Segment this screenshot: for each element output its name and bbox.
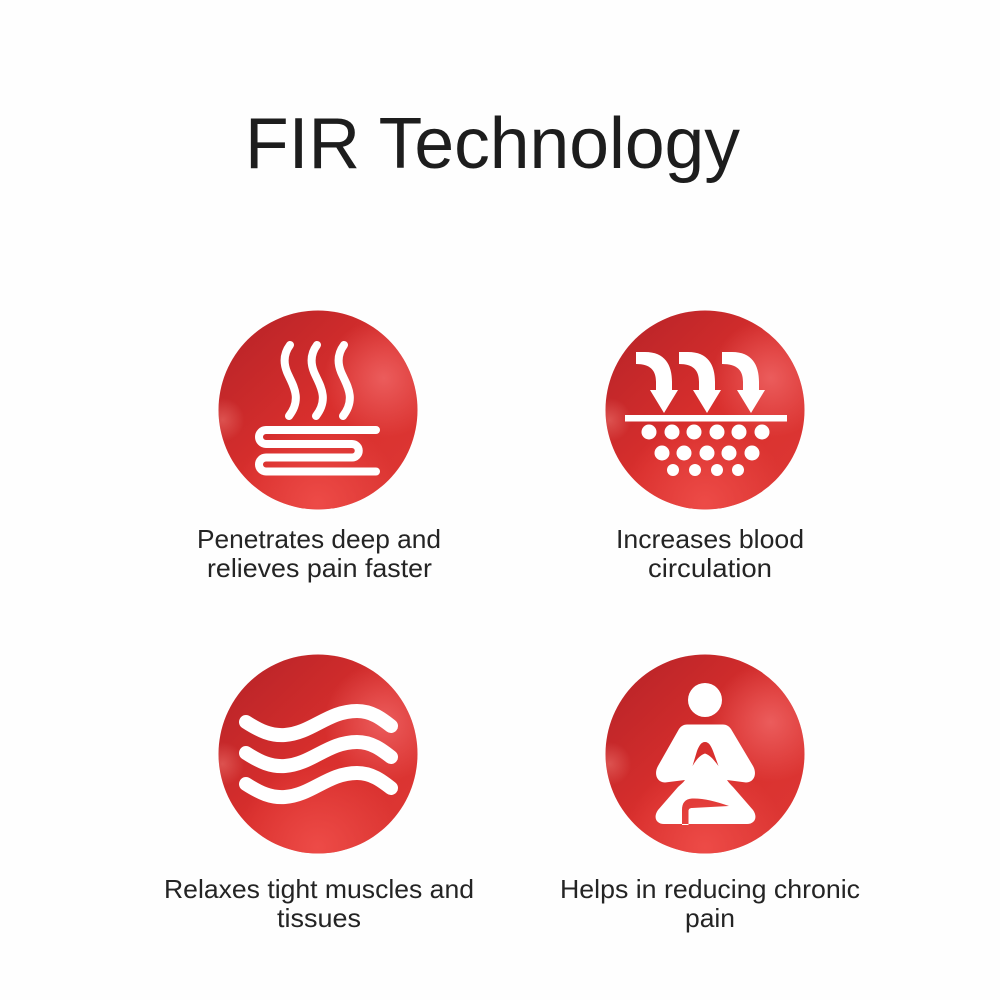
caption: circulation bbox=[648, 553, 772, 583]
caption: relieves pain faster bbox=[207, 553, 432, 583]
caption bbox=[616, 524, 804, 583]
caption: tissues bbox=[277, 903, 361, 933]
caption: Relaxes tight muscles and bbox=[164, 874, 474, 904]
icon: three waves bbox=[218, 654, 418, 854]
caption: pain bbox=[685, 903, 735, 933]
icon: arrows penetrating skin bbox=[606, 310, 804, 510]
panel: chronic pain bbox=[560, 654, 860, 933]
panel: penetrates deep bbox=[197, 310, 441, 583]
caption: Penetrates deep and bbox=[197, 524, 441, 554]
caption bbox=[164, 874, 474, 933]
panel: relaxes muscles bbox=[164, 654, 474, 933]
title: FIR Technology bbox=[245, 104, 740, 184]
icon: heat coil and steam bbox=[218, 310, 418, 510]
caption bbox=[197, 524, 441, 583]
caption bbox=[560, 874, 860, 933]
panel: blood circulation bbox=[606, 310, 804, 583]
caption: Increases blood bbox=[616, 524, 804, 554]
caption: Helps in reducing chronic bbox=[560, 874, 860, 904]
icon: meditating figure bbox=[606, 654, 804, 854]
